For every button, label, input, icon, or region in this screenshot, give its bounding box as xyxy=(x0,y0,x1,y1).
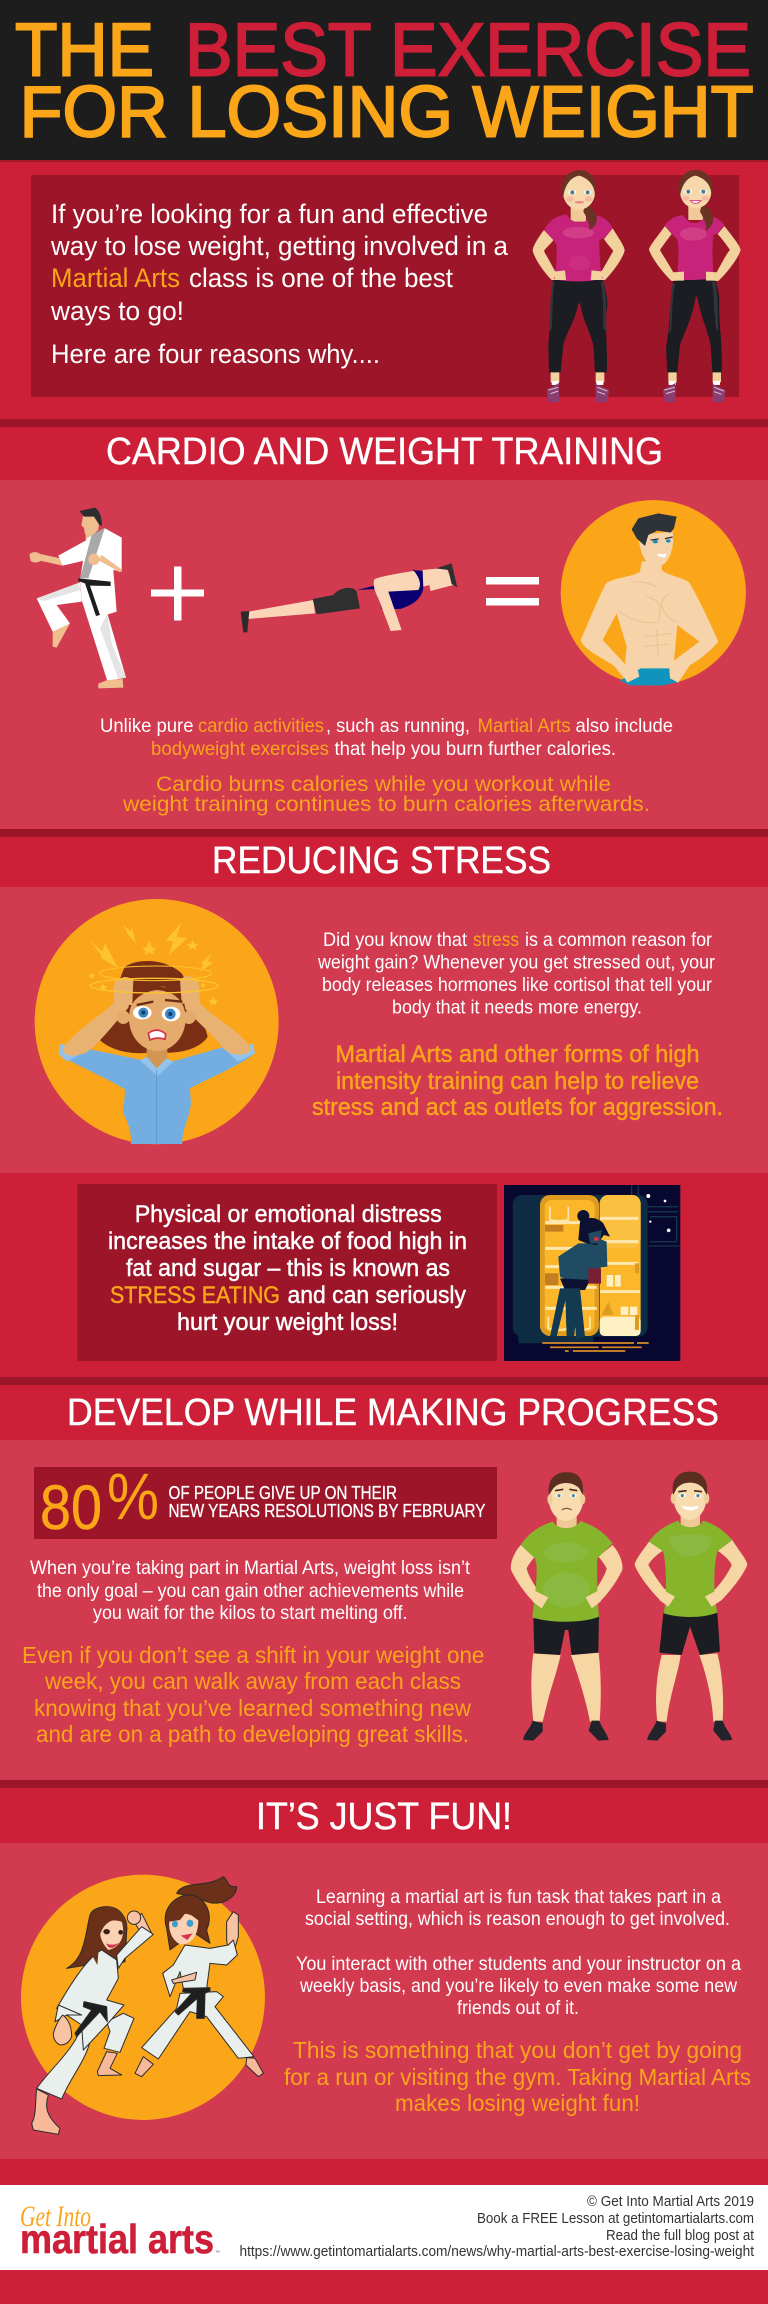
illustration: stressed woman in orange circle xyxy=(35,899,279,1144)
panel: intro xyxy=(0,160,768,419)
heading: cardio and weight training xyxy=(0,427,768,480)
heading: reducing stress: REDUCING STRESS xyxy=(212,840,551,882)
title: THE xyxy=(15,8,154,92)
stress explanation text: Did you know that xyxy=(323,929,468,951)
fun callout text: makes losing weight fun! xyxy=(395,2090,640,2116)
stress eating text box: hurt your weight loss! xyxy=(177,1309,398,1336)
icon: fit man in orange circle xyxy=(561,500,746,685)
panel: develop while making progress xyxy=(0,1440,768,1780)
fun explanation text: Learning a martial art is fun task that takes part in a xyxy=(316,1886,721,1908)
cardio explanation text: bodyweight exercises xyxy=(151,738,329,760)
heading: it's just fun: IT’S JUST FUN! xyxy=(256,1796,512,1838)
progress callout text: week, you can walk away from each class xyxy=(44,1668,461,1694)
progress explanation text: When you’re taking part in Martial Arts, weight loss isn’t xyxy=(30,1557,471,1579)
intro text: ways to go! xyxy=(50,296,184,326)
intro text xyxy=(50,199,509,369)
progress callout text: knowing that you’ve learned something new xyxy=(34,1695,471,1721)
icon: push-up figure xyxy=(241,563,457,632)
bottom red band xyxy=(0,2270,768,2304)
stress eating text box: increases the intake of food high in xyxy=(108,1228,467,1255)
cardio explanation text: also include xyxy=(576,715,673,737)
stress callout text xyxy=(312,1041,723,1121)
stress callout text: stress and act as outlets for aggression. xyxy=(312,1094,723,1121)
illustration: woman after xyxy=(649,170,741,402)
panel: stress eating xyxy=(0,1173,768,1377)
progress explanation text: you wait for the kilos to start melting off. xyxy=(93,1602,408,1624)
header panel xyxy=(0,0,768,160)
footer credits: Read the full blog post at xyxy=(606,2227,755,2244)
cardio explanation text xyxy=(100,715,673,760)
progress callout text: Even if you don’t see a shift in your weight one xyxy=(22,1642,484,1668)
illustration: man before xyxy=(511,1472,622,1741)
footer credits xyxy=(240,2193,755,2260)
fun callout text: This is something that you don’t get by going xyxy=(293,2037,742,2063)
stress explanation text xyxy=(317,929,715,1018)
illustration: woman before xyxy=(533,170,625,402)
title xyxy=(15,8,754,152)
title: FOR LOSING WEIGHT xyxy=(20,72,754,152)
stress explanation text: weight gain? Whenever you get stressed out, your xyxy=(317,952,715,974)
fun explanation text: friends out of it. xyxy=(457,1997,579,2019)
logo: Get Into xyxy=(20,2200,91,2233)
fun explanation text: weekly basis, and you’re likely to even make some new xyxy=(299,1975,738,1997)
heading: cardio and weight training: CARDIO AND WEIGHT TRAINING xyxy=(106,431,663,473)
statistic: 80 percent xyxy=(34,1459,497,1543)
intro text: If you’re looking for a fun and effective xyxy=(51,199,488,229)
illustration: man after xyxy=(635,1472,747,1741)
progress callout text: and are on a path to developing great skills. xyxy=(36,1721,469,1747)
cardio explanation text: Martial Arts xyxy=(478,715,571,737)
stress callout text: Martial Arts and other forms of high xyxy=(336,1041,700,1068)
fun explanation text: social setting, which is reason enough to get involved. xyxy=(305,1908,730,1930)
statistic: 80 percent: 80 xyxy=(40,1473,102,1543)
cardio explanation text: that help you burn further calories. xyxy=(334,738,616,760)
icon: karate man xyxy=(29,508,126,688)
cardio explanation text: cardio activities xyxy=(198,715,324,737)
statistic: 80 percent: % xyxy=(107,1459,159,1533)
cardio explanation text: , such as running, xyxy=(326,715,470,737)
footer panel xyxy=(0,2185,768,2270)
heading: develop while making progress xyxy=(0,1385,768,1440)
panel: cardio and weight training xyxy=(0,480,768,829)
intro text: Here are four reasons why.... xyxy=(51,339,380,369)
heading: reducing stress xyxy=(0,837,768,887)
illustration: two martial arts girls in orange circle xyxy=(21,1875,265,2134)
red band above footer xyxy=(0,2159,768,2185)
cardio callout text: Cardio burns calories while you workout while xyxy=(156,772,611,796)
progress explanation text xyxy=(30,1557,471,1624)
stress explanation text: is a common reason for xyxy=(525,929,712,951)
fun explanation text: You interact with other students and your instructor on a xyxy=(296,1953,741,1975)
cardio callout text xyxy=(122,772,650,816)
logo xyxy=(20,2200,220,2262)
stress explanation text: body releases hormones like cortisol that tell your xyxy=(322,974,712,996)
heading: develop while making progress: DEVELOP WHILE MAKING PROGRESS xyxy=(67,1392,719,1434)
illustration: woman at open fridge xyxy=(504,1185,680,1361)
intro text: way to lose weight, getting involved in a xyxy=(50,231,509,261)
statistic: 80 percent: OF PEOPLE GIVE UP ON THEIR xyxy=(168,1483,397,1503)
stress eating text box: fat and sugar – this is known as xyxy=(126,1255,450,1282)
title: BEST EXERCISE xyxy=(185,8,751,92)
icon: equals xyxy=(486,577,539,606)
stress callout text: intensity training can help to relieve xyxy=(336,1068,699,1095)
intro text: class is one of the best xyxy=(189,263,453,293)
section divider strip xyxy=(0,1780,768,1788)
footer credits: © Get Into Martial Arts 2019 xyxy=(587,2193,754,2210)
cardio explanation text: Unlike pure xyxy=(100,715,194,737)
stress explanation text: body that it needs more energy. xyxy=(392,996,642,1018)
logo: martial arts xyxy=(20,2216,214,2262)
section divider strip xyxy=(0,419,768,427)
fun explanation text xyxy=(296,1886,741,2019)
panel: reducing stress xyxy=(0,887,768,1173)
intro text: Martial Arts xyxy=(51,263,180,293)
stress eating text box: Physical or emotional distress xyxy=(135,1201,442,1228)
stress explanation text: stress xyxy=(473,929,519,951)
statistic: 80 percent: NEW YEARS RESOLUTIONS BY FEBRUARY xyxy=(168,1501,486,1521)
stress eating text box: and can seriously xyxy=(288,1282,466,1309)
progress explanation text: the only goal – you can gain other achievements while xyxy=(37,1580,464,1602)
fun callout text xyxy=(284,2037,751,2116)
section divider strip xyxy=(0,1377,768,1385)
progress callout text xyxy=(22,1642,484,1747)
section divider strip xyxy=(0,829,768,837)
fun callout text: for a run or visiting the gym. Taking Martial Arts xyxy=(284,2064,751,2090)
logo: ™ xyxy=(215,2250,220,2256)
icon: plus xyxy=(151,566,204,620)
stress eating text box: STRESS EATING xyxy=(110,1282,280,1309)
heading: it's just fun xyxy=(0,1788,768,1843)
panel: it's just fun xyxy=(0,1843,768,2159)
cardio callout text: weight training continues to burn calories afterwards. xyxy=(122,792,650,816)
stress eating text box xyxy=(78,1184,497,1361)
